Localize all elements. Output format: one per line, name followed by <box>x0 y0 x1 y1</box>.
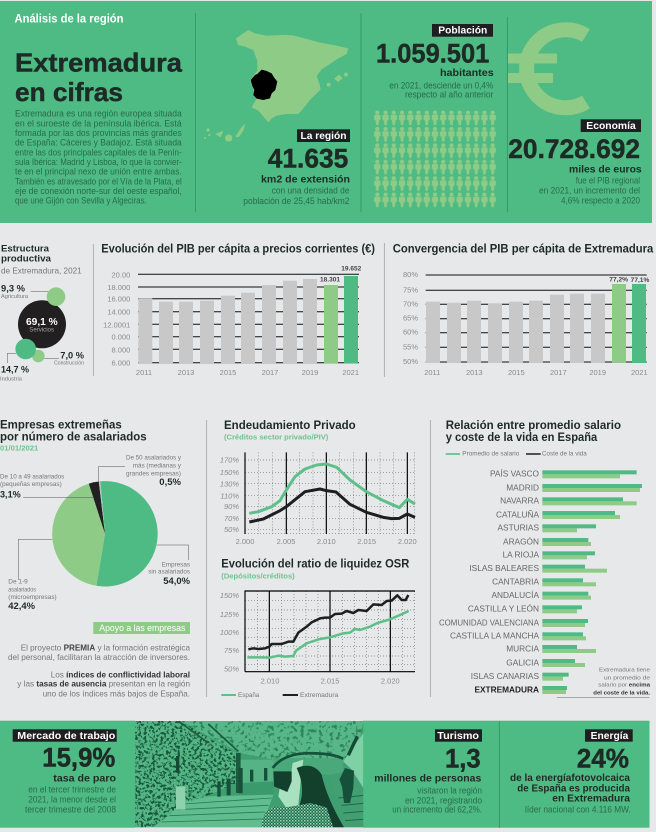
bar chart: 55% <box>403 342 418 351</box>
bubble chart: Servicios <box>29 327 55 334</box>
stat: Economía: fue el PIB regional <box>576 175 640 185</box>
bubble chart: 9,3 % <box>1 284 26 295</box>
intro text block: También es atravesado por el Vía de la Plata, el <box>15 176 182 186</box>
text block: apoyo <box>8 643 190 699</box>
bar chart: 65% <box>403 314 418 323</box>
bar chart: 14.000 <box>107 308 130 317</box>
bar chart: MURCIA <box>506 644 539 654</box>
bar chart: 2019 <box>589 368 606 377</box>
bar chart: 12.0001 <box>103 320 130 329</box>
heading: de Extremadura, 2021 <box>1 265 82 275</box>
line chart: 110% <box>220 491 239 500</box>
heading: productiva <box>1 254 52 265</box>
heading: 01/01/2021 <box>0 443 38 452</box>
heading: (Depósitos/créditos) <box>221 571 295 580</box>
bar chart <box>403 270 650 377</box>
bar chart: 8.000 <box>112 345 130 354</box>
bar chart: 2017 <box>262 368 278 377</box>
bar chart: ARAGÓN <box>503 536 539 546</box>
bar chart: 2013 <box>178 368 194 377</box>
stat: Población: habitantes <box>440 67 494 79</box>
panel: ratio de liquidez <box>220 559 415 699</box>
pie chart <box>0 455 191 612</box>
title: en cifras <box>15 77 123 107</box>
stat: Población: Población <box>438 26 487 36</box>
stat: Población <box>376 24 494 100</box>
pie chart: 42,4% <box>8 601 36 612</box>
line chart: 90% <box>224 502 239 511</box>
callout: Extremadura note: del coste de la vida. <box>593 690 650 696</box>
panel: endeudamiento privado <box>220 420 417 546</box>
stat: Población: respecto al año anterior <box>405 90 493 100</box>
pie chart: De 50 asalariados y <box>126 455 182 462</box>
line chart: 2.010 <box>317 537 336 546</box>
panel: top green header <box>0 1 652 223</box>
line chart: 170% <box>220 456 239 465</box>
bar chart: 0.000 <box>112 333 130 342</box>
line chart: 50% <box>224 525 239 534</box>
intro text block: entre las dos principales capitales de la Penín- <box>15 147 182 157</box>
panel: salario y coste de la vida <box>439 420 651 697</box>
heading: por número de asalariados <box>0 432 147 444</box>
heading: Evolución del PIB per cápita a precios corrientes (€) <box>101 243 375 255</box>
stat: La región: km2 de extensión <box>261 174 350 186</box>
line chart <box>220 591 415 685</box>
legend <box>446 450 587 458</box>
bubble chart: 7,0 % <box>60 350 85 361</box>
stat: mercado de trabajo <box>13 729 117 815</box>
panel: empresas extremeñas <box>0 419 191 699</box>
intro text block: en el suroeste de la península ibérica. Está <box>15 119 182 129</box>
intro text block: de España: Cáceres y Badajoz. Está situada <box>15 138 182 148</box>
heading: Endeudamiento Privado <box>224 420 356 432</box>
text block: apoyo: Los índices de conflictividad laboral <box>51 670 190 680</box>
bar chart: ISLAS BALEARES <box>469 563 539 573</box>
bar chart: 18.000 <box>107 283 130 292</box>
intro text block: te en el principal nexo de unión entre ambas. <box>15 167 182 177</box>
callout: Extremadura note: Extremadura tiene <box>599 668 650 674</box>
stat: mercado de trabajo: en el tercer trimestre de <box>28 785 116 795</box>
stat: energía <box>510 729 633 815</box>
stat: energía: Energía <box>591 731 629 742</box>
pie chart: (pequeñas empresas) <box>0 481 62 488</box>
callout: Extremadura note: un promedio de <box>604 675 650 681</box>
pie chart: asalariados <box>8 587 37 594</box>
bar chart: 70% <box>403 299 418 308</box>
heading: (Créditos sector privado/PIV) <box>224 432 329 441</box>
bar chart: 18.301 <box>320 276 340 283</box>
stat: La región: 41.635 <box>268 144 348 174</box>
legend: Coste de la vida <box>542 450 587 458</box>
stat: mercado de trabajo: Mercado de trabajo <box>17 731 115 742</box>
line chart: 100% <box>220 628 239 637</box>
line chart <box>220 452 417 546</box>
bar chart: GALICIA <box>506 657 539 667</box>
panel: convergencia del PIB per cápita <box>393 243 654 377</box>
line chart: 2.015 <box>357 537 376 546</box>
heading <box>1 244 82 275</box>
pie chart: De 10 a 49 asalariados <box>0 473 65 480</box>
heading: Relación entre promedio salario <box>446 420 621 432</box>
stat: turismo: 1,3 <box>445 743 481 773</box>
pie chart: (microempresas) <box>8 594 57 601</box>
bar chart: ANDALUCÍA <box>492 590 539 600</box>
photo: staircase in Cáceres with a woman photographing <box>135 721 363 827</box>
pie chart: Empresas <box>162 562 191 569</box>
intro text block: formada por las dos provincias más grandes <box>15 128 182 138</box>
panel: evolución del PIB per cápita <box>101 243 375 377</box>
line chart: 2.020 <box>398 537 417 546</box>
bar chart: 77,2% <box>609 277 628 284</box>
bar chart: ISLAS CANARIAS <box>471 671 539 681</box>
bar chart: 2013 <box>466 368 483 377</box>
bar chart: 2015 <box>508 368 525 377</box>
stat: energía: en Extremadura <box>552 793 630 805</box>
bar chart: EXTREMADURA <box>474 684 539 694</box>
bar chart: 50% <box>403 357 418 366</box>
icon: map of Spain with Extremadura <box>204 30 348 142</box>
bar chart: LA RIOJA <box>503 550 539 560</box>
callout: Extremadura note <box>557 668 651 697</box>
bar chart: NAVARRA <box>500 496 539 506</box>
stat: energía: de España es producida <box>517 782 630 794</box>
line chart: 50% <box>224 665 239 674</box>
line chart: 2.020 <box>381 676 400 685</box>
line chart: 150% <box>220 591 239 600</box>
stat: mercado de trabajo: tercer trimestre del 2008 <box>25 805 116 815</box>
stat: energía: de la energíafotovolcaica <box>510 772 630 784</box>
stat: Economía: 20.728.692 <box>508 134 640 164</box>
bar chart: 20.00 <box>112 270 130 279</box>
pie chart: 0,5% <box>159 477 182 488</box>
stat: Economía: 4,6% respecto a 2020 <box>561 195 640 205</box>
bar chart: 2017 <box>550 368 567 377</box>
heading <box>0 419 147 452</box>
stat: Economía: miles de euros <box>569 164 642 176</box>
bar chart: PAÍS VASCO <box>490 469 540 479</box>
bar chart: 16.000 <box>107 295 130 304</box>
line chart: 125% <box>220 610 239 619</box>
legend <box>221 692 339 699</box>
section label: Análisis de la región <box>14 14 124 26</box>
bubble chart: Agricultura <box>1 294 28 300</box>
stat: Economía: en 2021, un incremento del <box>539 185 640 195</box>
bubble chart: Industria <box>0 376 22 382</box>
stat: turismo: un incremento del 62,2%. <box>392 805 482 815</box>
bar chart: 19.652 <box>341 266 362 273</box>
bar chart: CATALUÑA <box>496 509 539 519</box>
heading: Evolución del ratio de liquidez OSR <box>221 559 410 571</box>
stat: turismo: visitaron la región <box>417 785 482 795</box>
bar chart: COMUNIDAD VALENCIANA <box>439 617 539 627</box>
bar chart: 60% <box>403 328 418 337</box>
stat: energía: 24% <box>577 743 629 773</box>
line chart: 70% <box>224 514 239 523</box>
bar chart: ASTURIAS <box>498 523 539 533</box>
icon: people pictogram <box>373 110 497 208</box>
bubble chart: Construcción <box>54 360 84 366</box>
legend: Extremadura <box>300 692 339 699</box>
heading: Convergencia del PIB per cápita de Extremadura <box>393 243 654 255</box>
bar chart: CASTILLA LA MANCHA <box>450 631 539 641</box>
stat: turismo: Turismo <box>437 731 479 742</box>
heading <box>446 420 621 444</box>
bar chart: 75% <box>403 285 418 294</box>
callout: apoyo a las empresas: Apoyo a las empresas <box>99 623 186 633</box>
intro text block <box>15 109 182 206</box>
line chart: 2.015 <box>321 676 339 685</box>
stat: La región: La región <box>300 131 346 142</box>
title <box>15 48 183 107</box>
bar chart: CASTILLA Y LEÓN <box>468 604 539 614</box>
text block: apoyo: y las tasas de ausencia presentan en la región <box>17 679 190 689</box>
bar chart: 2021 <box>631 368 648 377</box>
bubble chart: 14,7 % <box>1 365 30 376</box>
title: Extremadura <box>15 48 183 78</box>
pie chart: grandes empresas) <box>126 471 181 478</box>
stat: Economía <box>508 119 642 205</box>
panel: bottom green band <box>0 721 650 828</box>
line chart: 2.010 <box>261 676 279 685</box>
stat: turismo <box>374 729 482 815</box>
bar chart: 2015 <box>220 368 236 377</box>
line chart: 130% <box>220 479 239 488</box>
stat: mercado de trabajo: 15,9% <box>42 743 115 773</box>
intro text block: que une Gijón con Sevilla y Algeciras. <box>15 196 147 206</box>
bar chart: 77,1% <box>631 277 650 284</box>
stat: turismo: millones de personas <box>374 773 481 785</box>
panel: estructura productiva <box>0 244 85 382</box>
icon: euro symbol <box>508 30 586 108</box>
heading <box>221 559 410 580</box>
pie chart: sin asalariados <box>148 568 191 575</box>
line chart: 75% <box>224 646 239 655</box>
text block: apoyo: uno de los índices más bajos de España. <box>43 689 190 699</box>
text block: apoyo: El proyecto PREMIA y la formación estratégica <box>21 643 190 653</box>
intro text block: Extremadura es una región europea situada <box>15 109 182 119</box>
stat: Economía: Economía <box>586 121 636 132</box>
line chart: 2.000 <box>236 537 254 546</box>
bar chart <box>439 469 642 694</box>
stat: energía: líder nacional con 4.116 MW. <box>525 805 631 815</box>
pie chart: más (medianas y <box>133 463 182 470</box>
bar chart: MADRID <box>506 482 539 492</box>
bar chart: 2011 <box>424 368 440 377</box>
stat: La región <box>243 129 350 206</box>
bar chart: CANTABRIA <box>492 577 539 587</box>
stat: La región: con una densidad de <box>272 186 350 196</box>
text block: apoyo: del personal, facilitaran la atracción de inversores. <box>8 652 190 662</box>
bubble chart <box>0 284 85 382</box>
callout: Extremadura note: salario por encima <box>598 683 651 689</box>
bar chart: 2019 <box>302 368 318 377</box>
legend: Promedio de salario <box>462 450 520 458</box>
stat: mercado de trabajo: tasa de paro <box>53 773 116 785</box>
bar chart: 80% <box>403 270 418 279</box>
line chart: 2.005 <box>277 537 295 546</box>
bubble chart: 69,1 % <box>26 317 58 328</box>
bar chart: 2021 <box>342 368 359 377</box>
stat: Población: 1.059.501 <box>376 38 489 68</box>
heading: Empresas extremeñas <box>0 419 122 431</box>
heading <box>224 420 356 441</box>
pie chart: De 1-9 <box>8 578 28 585</box>
intro text block: sula Ibérica: Madrid y Lisboa, lo que la convier- <box>15 157 182 167</box>
intro text block: eje de conexión norte-sur del oeste español, <box>15 186 182 196</box>
stat: turismo: en 2021, registrando <box>405 795 482 805</box>
line chart: 150% <box>220 468 239 477</box>
bar chart: 6.000 <box>112 359 130 368</box>
pie chart: 54,0% <box>163 576 191 587</box>
stat: Población: en 2021, desciende un 0,4% <box>389 80 493 90</box>
pie chart: 3,1% <box>0 490 21 501</box>
heading: y coste de la vida en España <box>446 432 598 444</box>
bar chart <box>103 266 362 377</box>
legend: España <box>238 692 260 699</box>
bar chart: 2011 <box>136 368 152 377</box>
heading: Estructura <box>1 244 50 255</box>
stat: mercado de trabajo: 2021, la menor desde el <box>28 795 116 805</box>
stat: La región: población de 25,45 hab/km2 <box>243 196 350 206</box>
